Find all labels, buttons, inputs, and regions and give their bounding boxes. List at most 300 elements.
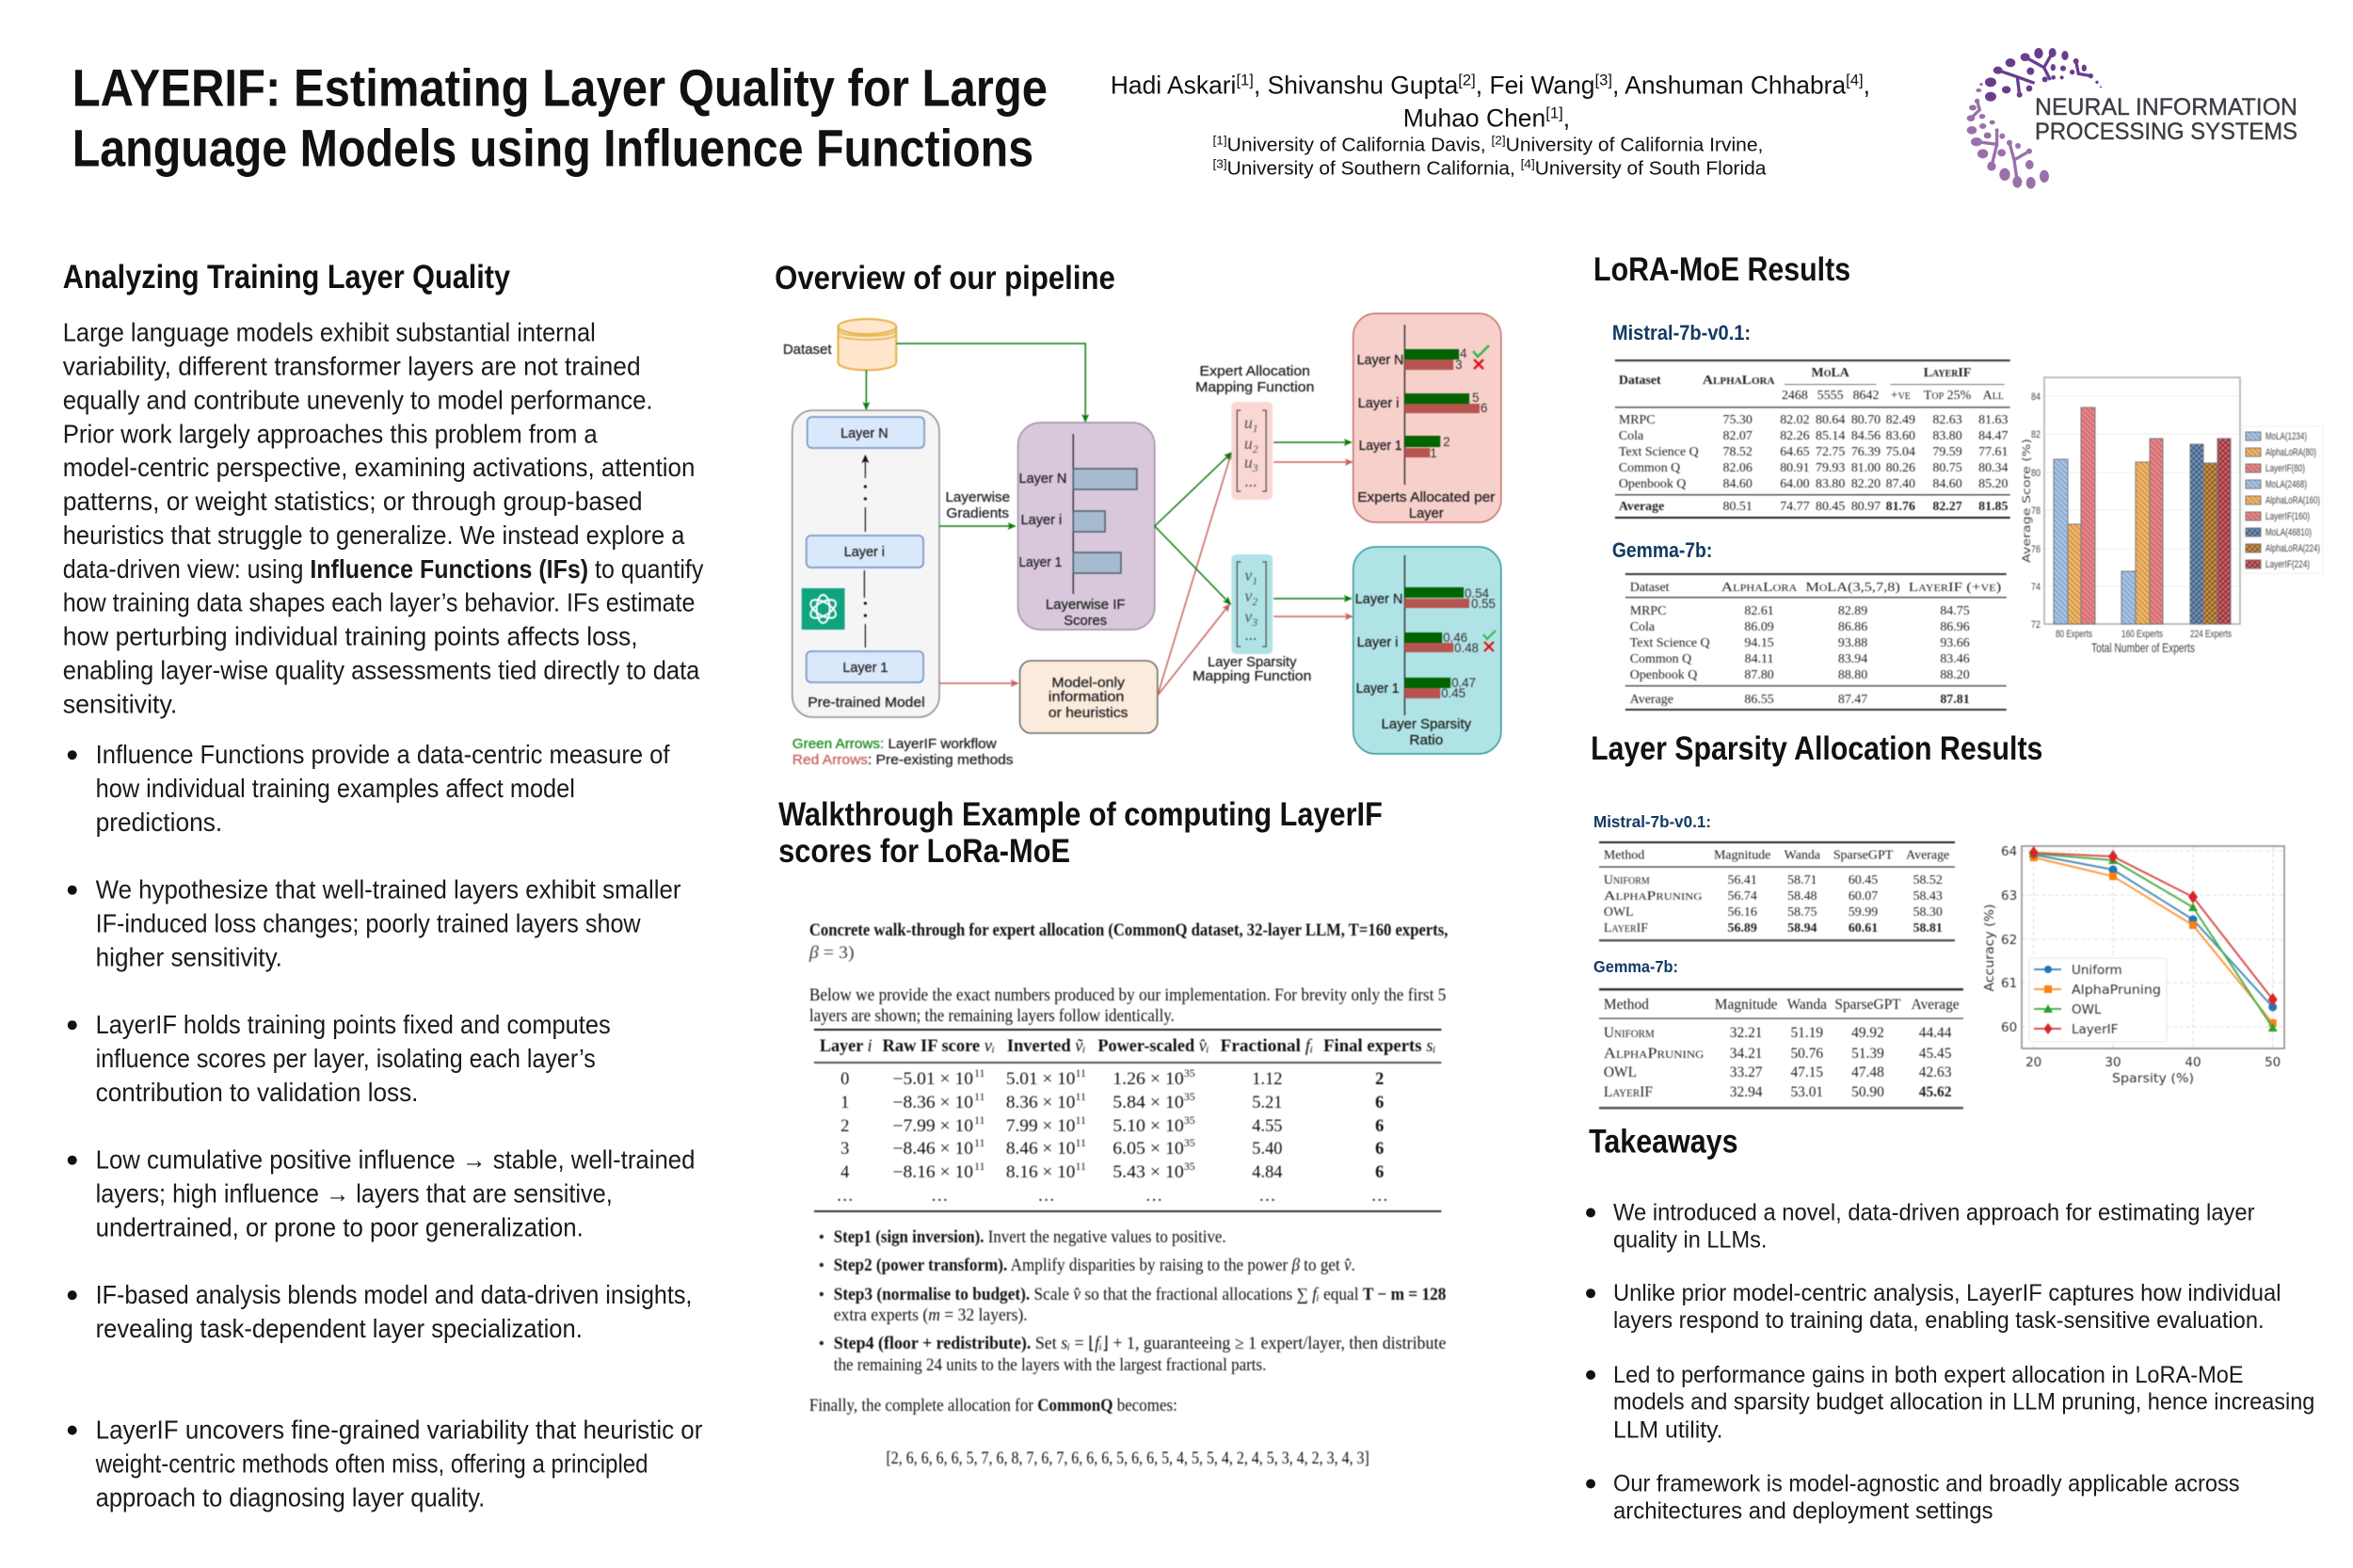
table: LoRA-MoE Mistral results: 81.85 [1978,500,2008,514]
table: LoRA-MoE Mistral results: 77.61 [1978,445,2008,459]
label: layer sparsity mapping: Layer Sparsity [1208,655,1297,670]
text block: steps: Step3 (normalise to budget). Scale v̂ so that the fractional allocations ∑ fᵢ equal T − m = 128 [834,1285,1446,1304]
bullet list: takeaways: Our framework is model-agnostic and broadly applicable across [1613,1470,2240,1496]
table: LoRA-MoE Mistral results: 80.45 [1816,500,1845,514]
table: walkthrough numbers: Layer i [820,1036,872,1055]
label: expert allocation mapping [1195,364,1314,395]
legend: arrow colours: Green Arrows: LayerIF workflow [792,737,997,752]
arrow: dataset to model [865,370,867,409]
title: Language Models using Influence Functions [72,118,1033,177]
label: Gemma sparsity: Gemma-7b: [1593,957,1678,976]
table: LoRA-MoE Gemma results: 82.61 [1744,604,1774,618]
legend: arrow colours: Red Arrows : Pre-existing methods [792,753,1014,768]
table: sparsity Gemma results: 44.44 [1919,1025,1952,1041]
authors and affiliations: University of California Irvine, [1506,135,1763,155]
bar chart: average score by total experts: 82 [2031,429,2041,440]
table: walkthrough numbers: … [1371,1186,1388,1205]
table: sparsity Mistral results: 60.07 [1849,889,1878,904]
table: sparsity Mistral results: Uniform [1604,873,1650,888]
bullet list: takeaways: layers respond to training data, enabling task-sensitive evaluation. [1613,1307,2265,1334]
table: walkthrough numbers: 2 [840,1116,849,1135]
table: sparsity Mistral results: 58.81 [1913,921,1943,936]
text block: steps: Step4 (floor + redistribute). Set sᵢ = ⌊fᵢ⌋ + 1, guaranteeing ≥ 1 expert/layer, then distribute [834,1334,1446,1353]
bullet list: hypotheses: contribution to validation loss. [96,1078,418,1107]
bullet list: hypotheses: We hypothesize that well-trained layers exhibit smaller [96,875,680,904]
table: LoRA-MoE Gemma results: 84.75 [1940,604,1970,618]
legend: line chart: Uniform [2072,963,2122,978]
panel: layer sparsity ratio: 0.47 [1451,676,1476,690]
authors and affiliations: [2] [1458,72,1476,89]
table: sparsity Gemma results: 47.15 [1790,1064,1823,1080]
panel: v vector: 3 [1251,616,1257,629]
table: LoRA-MoE Mistral results: 83.80 [1932,429,1962,443]
authors and affiliations: Muhao Chen [1403,104,1548,133]
table: walkthrough numbers: 11 [974,1090,985,1103]
panel: layer sparsity ratio: Ratio [1409,733,1443,748]
panel: u vector: u [1244,413,1253,432]
text block: steps: the remaining 24 units to the layers with the largest fractional parts. [834,1355,1266,1374]
table: LoRA-MoE Gemma results: 93.88 [1838,636,1867,650]
table: walkthrough numbers: 8.46 × 10 [1006,1139,1075,1158]
table: sparsity Gemma results: 42.63 [1919,1064,1952,1080]
table: sparsity Gemma results: 32.21 [1730,1025,1762,1041]
table: sparsity Gemma results: 51.39 [1851,1046,1884,1062]
bullet list: hypotheses: weight-centric methods often miss, offering a principled [95,1449,648,1479]
table: walkthrough numbers: 11 [1075,1113,1086,1127]
bullet list: hypotheses: Influence Functions provide a data-centric measure of [96,740,670,769]
table: LoRA-MoE Gemma results: 82.89 [1838,604,1867,618]
series: LayerIF [2029,846,2278,1006]
bullet list: takeaways: architectures and deployment settings [1613,1497,1993,1524]
text block: intro paragraph: Large language models exhibit substantial internal [63,318,596,347]
panel: experts allocated per layer: 6 [1481,401,1488,415]
table: walkthrough numbers: Inverted ṽᵢ [1007,1036,1085,1055]
table: LoRA-MoE Mistral results: 82.06 [1723,461,1753,475]
bar chart: average score by total experts: 80 [2031,468,2041,479]
table: sparsity Gemma results: LayerIF [1604,1084,1653,1100]
table: LoRA-MoE Gemma results: MRPC [1630,604,1666,618]
panel: layer sparsity ratio: Layer i [1357,635,1398,650]
panel: layer sparsity ratio: Layer N [1355,592,1402,607]
panel: layer sparsity ratio: Layer Sparsity [1382,717,1472,732]
table: LoRA-MoE Gemma results [1625,573,2007,711]
text block: steps: [2, 6, 6, 6, 6, 5, 7, 6, 8, 7, 6, 7, 6, 6, 6, 5, 6, 6, 5, 4, 5, 5, 4, 2, 4, 5, 3, 4, 2, 3, 4, 3] [886,1448,1369,1467]
table: walkthrough numbers: 35 [1184,1113,1195,1127]
table: sparsity Mistral results: AlphaPruning [1604,889,1702,904]
table: LoRA-MoE Mistral results: 83.80 [1816,477,1845,491]
table: walkthrough numbers: 4.55 [1252,1116,1282,1135]
heading: walkthrough example [778,796,1383,870]
table: sparsity Gemma results: 47.48 [1851,1064,1884,1080]
authors and affiliations: , Anshuman Chhabra [1612,72,1846,100]
table: LoRA-MoE Gemma results: Text Science Q [1630,636,1710,650]
panel: v vector: ... [1245,625,1257,644]
table: sparsity Mistral results: 58.75 [1787,905,1817,920]
bullet list: hypotheses: how individual training examples affect model [96,774,575,803]
bullet list: hypotheses: IF-based analysis blends model and data-driven insights, [96,1280,692,1309]
heading: analyzing: Analyzing Training Layer Quality [63,259,511,296]
bullet list: hypotheses: undertrained, or prone to poor generalization. [96,1212,584,1241]
bar chart: average score by total experts: 224 Experts [2190,629,2232,640]
table: LoRA-MoE Mistral results: Top 25% [1924,389,1972,403]
table: LoRA-MoE Mistral results: Common Q [1619,461,1680,475]
text block: intro paragraph: enabling layer-wise quality assessments tied directly to data [63,655,700,684]
panel: layer sparsity ratio: Layer 1 [1356,681,1399,696]
bar chart: average score by total experts: 80 Experts [2056,629,2092,640]
table: walkthrough numbers: −8.16 × 10 [892,1162,973,1181]
bullet list: hypotheses [68,740,702,1512]
table: LoRA-MoE Mistral results: 80.34 [1978,461,2008,475]
table: LoRA-MoE Mistral results: 78.52 [1723,445,1753,459]
authors and affiliations: , Fei Wang [1476,72,1595,100]
table: sparsity Gemma results: 45.45 [1919,1046,1952,1062]
panel: layerwise IF scores: Layer i [1021,513,1062,528]
table: walkthrough numbers [814,1029,1441,1212]
table: sparsity Gemma results: Method [1604,997,1649,1013]
line chart: accuracy vs sparsity: 62 [2001,933,2017,948]
panel: u vector: ... [1245,472,1257,490]
panel: walkthrough text and table [808,920,1448,1467]
table: LoRA-MoE Gemma results: 88.80 [1838,668,1867,682]
series: AlphaPruning [2030,854,2277,1027]
table: LoRA-MoE Mistral results: 82.26 [1780,429,1810,443]
legend: line chart: OWL [2072,1002,2102,1017]
table: walkthrough numbers: 4.84 [1252,1162,1282,1181]
table: walkthrough numbers: Power-scaled v̂ᵢ [1097,1036,1209,1055]
table: LoRA-MoE Mistral results: 84.47 [1978,429,2008,443]
table: sparsity Gemma results: 45.62 [1919,1084,1952,1100]
panel: layerwise IF scores: Layer N [1019,472,1066,487]
table: walkthrough numbers: −5.01 × 10 [892,1069,973,1088]
legend: arrow colours [792,737,1014,768]
table: sparsity Mistral results: 58.71 [1787,873,1817,888]
table: walkthrough numbers: 6 [1375,1116,1384,1135]
table: walkthrough numbers: … [1258,1186,1276,1205]
panel: layerwise IF scores [1018,423,1155,630]
table: sparsity Gemma results: 53.01 [1790,1084,1823,1100]
authors and affiliations: University of California Davis, [1227,135,1491,155]
authors and affiliations: [1] [1236,72,1254,89]
text block: intro paragraph [63,318,704,718]
heading: LoRA-MoE results: LoRA-MoE Results [1593,251,1850,288]
table: sparsity Mistral results: 59.99 [1849,905,1878,920]
table: LoRA-MoE Mistral results: MRPC [1619,413,1656,427]
pipeline diagram [783,313,1501,768]
label: Gemma: Gemma-7b: [1612,538,1712,562]
table: LoRA-MoE Mistral results: LayerIF [1924,366,1971,380]
arrow: dataset to IF scores [896,344,1085,422]
panel: takeaways [1586,1124,2314,1524]
panel: pre-trained model: Layer 1 [842,661,888,676]
table: sparsity Gemma results [1599,988,1963,1109]
logo: NeurIPS: PROCESSING SYSTEMS [2035,119,2297,145]
heading: overview of pipeline: Overview of our pipeline [775,260,1115,296]
panel: experts allocated per layer: Layer [1409,506,1444,521]
legend: bar chart: LayerIF(160) [2265,511,2310,522]
legend: line chart [2029,958,2167,1042]
table: walkthrough numbers: 5.10 × 10 [1112,1116,1184,1135]
table: walkthrough numbers: 8.16 × 10 [1006,1162,1075,1181]
line chart: accuracy vs sparsity: 20 [2025,1055,2041,1070]
bullet list: takeaways: LLM utility. [1613,1417,1723,1444]
bullet list: hypotheses: layers; high influence → layers that are sensitive, [96,1179,613,1208]
table: sparsity Mistral results: 58.48 [1787,889,1817,904]
arrows: to mapping functions [1155,453,1231,696]
authors and affiliations: [3] [1212,156,1227,170]
panel: model-only information [1020,661,1158,733]
table: LoRA-MoE Mistral results: 74.77 [1780,500,1810,514]
text block: intro paragraph: variability, different transformer layers are not trained [63,352,641,381]
table: LoRA-MoE Mistral results: 82.02 [1780,413,1810,427]
table: sparsity Mistral results: 56.74 [1728,889,1757,904]
table: sparsity Gemma results: Uniform [1604,1025,1655,1041]
line chart: accuracy vs sparsity: 63 [2001,888,2017,904]
bullet list: hypotheses: higher sensitivity. [96,942,282,971]
legend: bar chart [2243,426,2323,573]
authors and affiliations: [1] [1212,133,1227,147]
legend: bar chart: MoLA(1234) [2265,431,2307,442]
table: LoRA-MoE Mistral results: 79.59 [1932,445,1962,459]
table: LoRA-MoE Mistral results: 79.93 [1816,461,1845,475]
table: LoRA-MoE Mistral results: 82.27 [1932,500,1962,514]
table: walkthrough numbers: Final experts sᵢ [1323,1036,1436,1055]
table: LoRA-MoE Mistral results: Cola [1619,429,1643,443]
panel: v vector: v [1244,566,1252,584]
label: layerwise gradients: Gradients [946,506,1009,521]
legend: bar chart: MoLA(2468) [2265,479,2307,490]
table: LoRA-MoE Gemma results: 94.15 [1744,636,1774,650]
table: LoRA-MoE Mistral results: 80.26 [1886,461,1915,475]
table: LoRA-MoE Mistral results: 8642 [1853,389,1879,403]
table: LoRA-MoE Mistral results: 85.14 [1816,429,1845,443]
table: walkthrough numbers: 6 [1375,1093,1384,1112]
table: sparsity Mistral results: Magnitude [1714,848,1770,863]
table: walkthrough numbers: 35 [1184,1136,1195,1149]
table: LoRA-MoE Gemma results: 87.47 [1838,693,1867,707]
table: walkthrough numbers: 1 [840,1093,849,1112]
bullet list: hypotheses: predictions. [96,808,222,837]
panel: model-only information: information [1048,690,1124,705]
table: LoRA-MoE Gemma results: AlphaLora [1721,581,1798,595]
table: LoRA-MoE Gemma results: 84.11 [1745,652,1773,666]
panel: model-only information: or heuristics [1048,706,1128,721]
table: sparsity Mistral results: OWL [1604,905,1634,920]
table: sparsity Mistral results: SparseGPT [1833,848,1894,863]
table: LoRA-MoE Mistral results: Openbook Q [1619,477,1686,491]
authors and affiliations: University of South Florida [1535,158,1767,179]
bullet list: takeaways [1586,1199,2314,1524]
bullet list: takeaways: Unlike prior model-centric analysis, LayerIF captures how individual [1613,1280,2281,1306]
legend: bar chart: LayerIF(224) [2265,559,2310,570]
table: walkthrough numbers: −8.36 × 10 [892,1093,973,1112]
panel: experts allocated per layer [1353,313,1501,522]
label: expert allocation mapping: Expert Allocation [1200,364,1310,379]
authors and affiliations: [2] [1491,133,1506,147]
bullet list: hypotheses: LayerIF uncovers fine-grained variability that heuristic or [96,1416,702,1445]
label: layer sparsity mapping [1193,655,1311,684]
authors and affiliations: , [1864,72,1870,100]
table: LoRA-MoE Gemma results: 88.20 [1940,668,1970,682]
table: sparsity Gemma results: 50.76 [1790,1046,1823,1062]
table: LoRA-MoE Mistral results: 81.76 [1886,500,1915,514]
table: walkthrough numbers: 11 [974,1160,985,1173]
table: walkthrough numbers: 5.01 × 10 [1006,1069,1075,1088]
bar chart: average score by total experts [2020,377,2323,655]
text block: intro [808,920,1448,1025]
table: LoRA-MoE Mistral results: Dataset [1619,374,1661,388]
icon: ChatGPT logo [802,588,845,630]
table: walkthrough numbers: … [1145,1186,1162,1205]
authors and affiliations [1111,72,1870,179]
table: LoRA-MoE Mistral results: 80.97 [1851,500,1881,514]
table: sparsity Mistral results: 60.61 [1849,921,1878,936]
table: LoRA-MoE Gemma results: 86.96 [1940,620,1970,634]
title: LAYERIF: Estimating Layer Quality for Large [72,58,1048,118]
panel: u vector: 3 [1252,461,1258,474]
table: sparsity Mistral results: 58.30 [1913,905,1943,920]
table: walkthrough numbers: 2 [1375,1069,1384,1088]
bullet list: hypotheses: LayerIF holds training points fixed and computes [96,1010,611,1039]
table: walkthrough numbers: 8.36 × 10 [1006,1093,1075,1112]
bar chart: average score by total experts: 76 [2031,544,2041,555]
text block: intro: Concrete walk-through for expert allocation (CommonQ dataset, 32-layer LLM, T=160 experts, [809,920,1448,940]
table: walkthrough numbers: 1.26 × 10 [1112,1069,1184,1088]
panel: experts allocated per layer: Layer i [1358,396,1399,411]
table: walkthrough numbers: 11 [1075,1066,1086,1080]
label: layer sparsity mapping: Mapping Function [1193,669,1311,684]
table: walkthrough numbers: 5.84 × 10 [1112,1093,1184,1112]
line chart: accuracy vs sparsity: Accuracy (%) [1982,904,1997,992]
table: walkthrough numbers: 11 [974,1113,985,1127]
table: LoRA-MoE Gemma results: 86.86 [1838,620,1867,634]
panel: u vector: 1 [1253,422,1258,435]
table: LoRA-MoE Mistral results: Average [1619,500,1664,514]
bullet list: hypotheses: revealing task-dependent layer specialization. [96,1314,583,1343]
panel: u vector [1231,402,1273,500]
table: LoRA-MoE Gemma results: 83.94 [1838,652,1867,666]
panel: experts allocated per layer: Layer 1 [1359,439,1401,454]
table: LoRA-MoE Gemma results: Openbook Q [1630,668,1697,682]
table: LoRA-MoE Gemma results: 87.80 [1744,668,1774,682]
legend: bar chart: AlphaLoRA(80) [2265,447,2316,458]
line chart: accuracy vs sparsity: 64 [2001,844,2017,859]
panel: pre-trained model [792,410,939,717]
arrows: to result panels [1273,442,1353,616]
table: LoRA-MoE Mistral results: 80.91 [1780,461,1810,475]
table: LoRA-MoE Mistral results: MoLA [1812,366,1849,380]
text block: intro paragraph: how training data shapes each layer’s behavior. IFs estimate [63,588,695,617]
authors and affiliations: [3] [1595,72,1612,89]
text block: steps [809,1227,1446,1467]
title [72,58,1048,177]
authors and affiliations: [1] [1545,104,1563,122]
text block: steps: Finally, the complete allocation for CommonQ becomes: [809,1396,1177,1415]
table: LoRA-MoE Mistral results: Text Science Q [1619,445,1699,459]
table: LoRA-MoE Gemma results: 83.46 [1940,652,1970,666]
text block: intro: β = 3) [808,943,855,963]
table: sparsity Gemma results: OWL [1604,1064,1637,1080]
table: walkthrough numbers: 11 [1075,1136,1086,1149]
authors and affiliations: University of Southern California, [1227,158,1521,179]
legend: bar chart: MoLA(46810) [2265,527,2312,538]
bar chart: average score by total experts: Average Score (%) [2020,439,2033,563]
table: sparsity Gemma results: Magnitude [1715,997,1778,1013]
table: LoRA-MoE Mistral results: 75.30 [1723,413,1753,427]
table: sparsity Mistral results: 58.52 [1913,873,1943,888]
legend: line chart: LayerIF [2072,1022,2118,1037]
bullet list: hypotheses: approach to diagnosing layer quality. [96,1482,485,1512]
table: sparsity Gemma results: 51.19 [1790,1025,1823,1041]
text block: intro: layers are shown; the remaining layers follow identically. [809,1006,1175,1025]
authors and affiliations: , Shivanshu Gupta [1254,72,1458,100]
line chart: accuracy vs sparsity [1982,844,2284,1086]
arrow: heuristics input [939,682,1018,684]
authors and affiliations: [4] [1846,72,1864,89]
text block: intro paragraph: Prior work largely approaches this problem from a [63,419,598,448]
label: layerwise gradients [945,490,1010,521]
panel: layer sparsity ratio [1353,547,1501,754]
panel: experts allocated per layer: 3 [1455,358,1463,372]
panel: layer sparsity ratio: 0.48 [1454,641,1479,655]
authors and affiliations: Hadi Askari [1111,72,1239,100]
authors and affiliations: [4] [1521,156,1535,170]
panel: layer sparsity ratio: 0.54 [1465,586,1489,600]
panel: v vector: v [1244,586,1252,605]
table: walkthrough numbers: 11 [974,1136,985,1149]
panel: experts allocated per layer: Experts Allocated per [1357,490,1496,505]
table: sparsity Gemma results: 34.21 [1730,1046,1762,1062]
table: walkthrough numbers: Raw IF score vᵢ [883,1036,995,1055]
table: LoRA-MoE Mistral results: AlphaLora [1703,374,1775,388]
line chart: accuracy vs sparsity: 30 [2105,1055,2121,1070]
table: LoRA-MoE Mistral results: 80.64 [1816,413,1845,427]
table: walkthrough numbers: 35 [1184,1090,1195,1103]
table: LoRA-MoE Mistral results: 80.75 [1932,461,1962,475]
table: walkthrough numbers: 4 [840,1162,849,1181]
table: sparsity Mistral results: 56.89 [1728,921,1757,936]
table: walkthrough numbers: 6 [1375,1162,1384,1181]
table: LoRA-MoE Mistral results: 82.20 [1851,477,1881,491]
text block: steps: Step1 (sign inversion). Invert the negative values to positive. [834,1227,1226,1247]
panel: experts allocated per layer: 5 [1472,391,1480,405]
table: LoRA-MoE Gemma results: Cola [1630,620,1655,634]
series: Uniform [2029,851,2277,1011]
line chart: accuracy vs sparsity: 61 [2001,976,2017,991]
panel: experts allocated per layer: 1 [1430,446,1437,460]
label: layerwise gradients: Layerwise [945,490,1010,505]
table: sparsity Gemma results: 50.90 [1851,1084,1884,1100]
logo: NeurIPS: NEURAL INFORMATION [2035,94,2297,120]
bullet list: takeaways: quality in LLMs. [1613,1226,1767,1253]
table: sparsity Mistral results: 58.43 [1913,889,1943,904]
panel: v vector [1231,554,1273,654]
heading: layer sparsity allocation results: Layer Sparsity Allocation Results [1591,730,2042,767]
table: LoRA-MoE Gemma results: 93.66 [1940,636,1970,650]
panel: pre-trained model: Layer i [844,545,885,560]
table: LoRA-MoE Gemma results: Common Q [1630,652,1691,666]
bullet list: takeaways: Led to performance gains in both expert allocation in LoRA-MoE [1613,1362,2244,1388]
panel: layer sparsity ratio: 0.46 [1443,631,1467,645]
panel: u vector: u [1244,434,1253,453]
text block: steps: Step2 (power transform). Amplify disparities by raising to the power β to get v̂. [834,1256,1355,1275]
text block: intro paragraph: patterns, or weight statistics; or through group-based [63,487,643,516]
table: LoRA-MoE Gemma results: Average [1630,693,1673,707]
table: walkthrough numbers: 5.43 × 10 [1112,1162,1184,1181]
bullet list: takeaways: models and sparsity budget allocation in LLM pruning, hence increasing [1613,1389,2314,1416]
table: LoRA-MoE Mistral results: 5555 [1817,389,1844,403]
table: LoRA-MoE Mistral results: 80.51 [1723,500,1753,514]
table: sparsity Mistral results: Method [1604,848,1644,863]
